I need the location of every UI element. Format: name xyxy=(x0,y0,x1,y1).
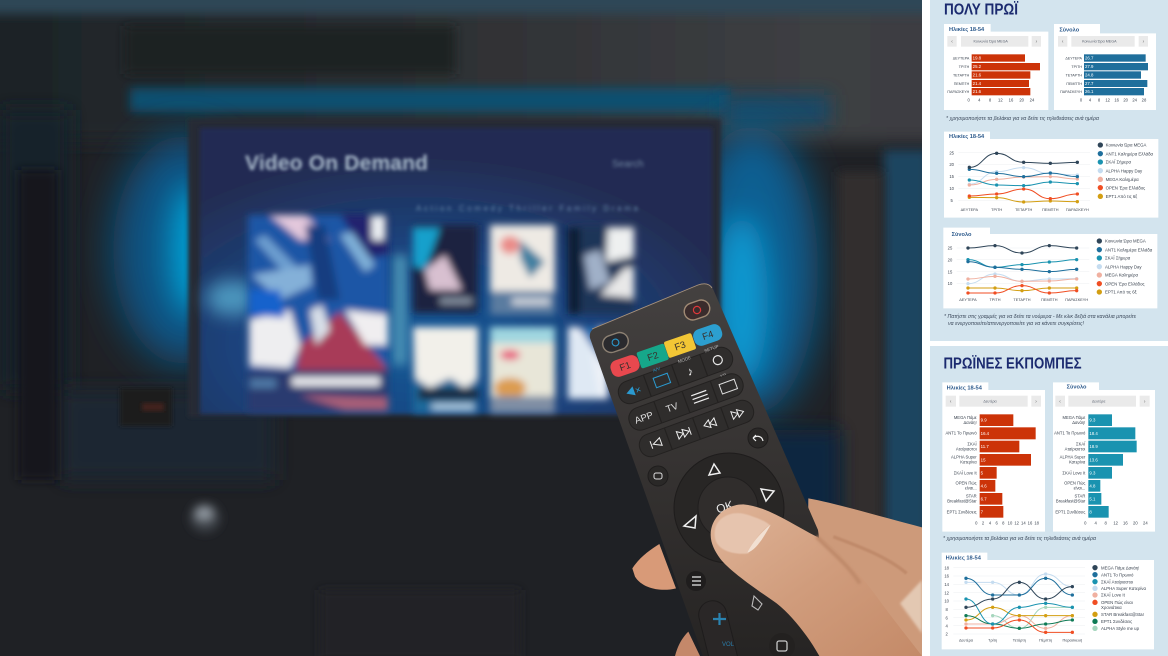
bar chart: Σύνολο shows: Σύνολο xyxy=(1067,385,1087,391)
poster: thumbnail 4 xyxy=(413,327,478,413)
button row: APP, TV, menu, keyboard: APP xyxy=(633,410,655,427)
bar chart: Ηλικίες 18-54 shows: ΣΚΑΪ Love It xyxy=(954,470,978,475)
bar chart: Σύνολο shows: ΑΝΤ1 Το Πρωινό xyxy=(1054,431,1086,436)
bar chart: Σύνολο: 26.1 xyxy=(1085,89,1094,94)
bar chart: Ηλικίες 18-54 shows: 6.7 xyxy=(981,496,987,501)
legend: ΕΡΤ1 Από τις 6ξ xyxy=(1106,194,1137,199)
bar chart: Σύνολο shows: 8 xyxy=(1105,521,1108,526)
bar chart: Σύνολο: 16 xyxy=(1114,97,1120,102)
line chart: shows Ηλικίες 18-54: Παρασκευή xyxy=(1063,639,1082,643)
bar chart: Σύνολο shows: Breakfast@Star xyxy=(1056,499,1086,504)
bar chart: Σύνολο shows: Δευτέρα xyxy=(1092,400,1106,404)
bar chart: Σύνολο shows: ALPHA Super xyxy=(1060,454,1086,459)
function keys xyxy=(609,322,724,379)
bar chart: Ηλικίες 18-54 shows: Δευτέρα xyxy=(983,400,998,404)
button row: APP, TV, menu, keyboard: TV xyxy=(665,401,680,415)
bar chart: Σύνολο shows: ΣΚΑΪ Love It xyxy=(1062,470,1086,475)
lamp highlight xyxy=(190,504,220,532)
note: instructions xyxy=(944,313,1137,327)
bar chart: Σύνολο shows: STAR xyxy=(1075,494,1085,499)
bar chart: Ηλικίες 18-54 shows: ALPHA Super xyxy=(951,454,977,459)
note: instructions: * Πατήστε στις γραμμές για να δείτε τα νούμερα - Με κλικ δεξιά στα κανάλια μπορείτε xyxy=(944,313,1137,320)
line chart: Σύνολο: Σύνολο xyxy=(952,232,972,238)
legend: ΑΝΤ1 Το Πρωινό xyxy=(1101,572,1134,577)
bar chart: Ηλικίες 18-54 shows: STAR xyxy=(966,494,977,499)
line chart: shows Ηλικίες 18-54: Πέμπτη xyxy=(1039,639,1052,643)
key captions xyxy=(654,344,726,376)
line chart: Ηλικίες 18-54: 25 xyxy=(949,150,955,155)
bar chart: Σύνολο shows: 18.4 xyxy=(1089,431,1098,436)
line chart: Ηλικίες 18-54: ΤΡΙΤΗ xyxy=(991,208,1002,212)
poster: thumbnail 5 xyxy=(490,327,555,413)
line chart: shows Ηλικίες 18-54: Δευτέρα xyxy=(959,639,974,643)
note: * χρησιμοποιήστε τα βελάκια για να δείτε τις τηλεθεάσεις ανά ημέρα xyxy=(943,535,1097,542)
bar chart: Ηλικίες 18-54 shows: 8 xyxy=(1002,521,1005,526)
bar chart: Ηλικίες 18-54: ΔΕΥΤΕΡΑ xyxy=(953,56,970,60)
line chart: Σύνολο: 25 xyxy=(948,246,953,251)
bar chart: Ηλικίες 18-54: ΤΕΤΑΡΤΗ xyxy=(953,73,970,77)
bar chart: Ηλικίες 18-54 shows: Αταίριαστοι xyxy=(956,447,977,452)
line chart: shows Ηλικίες 18-54: 6 xyxy=(946,615,949,620)
bar chart: Ηλικίες 18-54 shows: ΣΚΑΪ xyxy=(967,442,977,447)
key captions: A/V xyxy=(652,366,661,373)
bar chart: Ηλικίες 18-54 shows: › xyxy=(1035,399,1037,405)
bar chart: Ηλικίες 18-54 shows: ΑΝΤ1 Το Πρωινό xyxy=(945,431,977,436)
bar chart: Σύνολο: ΔΕΥΤΕΡΑ xyxy=(1065,56,1083,60)
back fingers xyxy=(632,498,922,656)
bar chart: Σύνολο shows: Δανάη! xyxy=(1072,420,1085,425)
bar chart: Σύνολο shows: ‹ xyxy=(1059,399,1061,405)
bar chart: Σύνολο: ΤΕΤΑΡΤΗ xyxy=(1066,73,1082,77)
bar chart: Σύνολο shows: 12 xyxy=(1113,521,1119,526)
bar chart: Σύνολο: ‹ xyxy=(1062,39,1064,45)
bar chart: Ηλικίες 18-54: Ηλικίες 18-54 xyxy=(949,27,985,33)
line chart: Ηλικίες 18-54: 15 xyxy=(949,174,955,179)
bar chart: Ηλικίες 18-54: 12 xyxy=(998,97,1003,102)
directional pad xyxy=(674,453,784,563)
line chart: Σύνολο: 10 xyxy=(948,281,953,286)
bar chart: Σύνολο: Σύνολο xyxy=(1059,27,1080,33)
key captions: MODE xyxy=(677,355,692,364)
bar chart: Ηλικίες 18-54 shows: 16.4 xyxy=(981,431,990,436)
line chart: Σύνολο: ΤΡΙΤΗ xyxy=(989,298,1001,302)
bar chart: Ηλικίες 18-54 shows xyxy=(942,382,1045,532)
function keys: F3 xyxy=(673,339,687,353)
backlight glow right of TV xyxy=(686,125,818,415)
line chart: Σύνολο: ΠΑΡΑΣΚΕΥΗ xyxy=(1065,298,1088,302)
bar chart: Ηλικίες 18-54 shows: MEGA Πάμε xyxy=(954,415,977,420)
line chart: Ηλικίες 18-54: ΔΕΥΤΕΡΑ xyxy=(961,208,978,212)
line chart: shows Ηλικίες 18-54: 12 xyxy=(944,590,950,595)
bar chart: Σύνολο shows: 4.8 xyxy=(1089,483,1096,488)
bar chart: Ηλικίες 18-54 shows: είναι... xyxy=(965,486,977,491)
bar chart: Ηλικίες 18-54 shows: 10 xyxy=(1008,521,1013,526)
thumb nail xyxy=(715,513,770,554)
bar chart: Ηλικίες 18-54: ΤΡΙΤΗ xyxy=(959,65,970,69)
bar chart: Σύνολο shows: 16 xyxy=(1123,521,1128,526)
bar chart: Σύνολο: ΤΡΙΤΗ xyxy=(1071,65,1082,69)
legend xyxy=(1098,142,1153,199)
bar chart: Ηλικίες 18-54: 25.2 xyxy=(973,64,982,69)
button row: APP, TV, menu, keyboard xyxy=(628,373,744,431)
bar chart: Σύνολο shows: OPEN Πώς xyxy=(1064,481,1085,486)
bar chart: Ηλικίες 18-54 shows: 9.9 xyxy=(981,418,987,423)
bar chart: Σύνολο shows: 9.3 xyxy=(1089,418,1096,423)
bar chart: Ηλικίες 18-54: 0 xyxy=(968,97,971,102)
legend: ΕΡΤ1 Συνδέσεις xyxy=(1101,619,1132,624)
bar chart: Σύνολο: 20 xyxy=(1123,97,1129,102)
bar chart: Σύνολο shows: MEGA Πάμε xyxy=(1063,415,1085,420)
bar chart: Σύνολο shows: 9.3 xyxy=(1089,470,1096,475)
line chart: shows Ηλικίες 18-54: 2 xyxy=(946,632,949,637)
legend: ALPHA Super Κατερίνα xyxy=(1101,586,1146,591)
bar chart: Ηλικίες 18-54: 8 xyxy=(989,97,992,102)
bar chart: Σύνολο: › xyxy=(1142,39,1144,45)
volume rocker: VOL xyxy=(722,642,735,648)
key captions: KB xyxy=(720,372,727,379)
legend: MEGA Καλημέρα xyxy=(1106,177,1139,182)
bar chart: Ηλικίες 18-54 shows: 7 xyxy=(981,509,984,514)
menu list button xyxy=(686,571,706,591)
legend: STAR Breakfast@Star xyxy=(1101,612,1145,617)
function keys: F1 xyxy=(618,360,632,374)
poster: large feature xyxy=(248,215,388,412)
bar chart: Σύνολο shows: Κατερίνα xyxy=(1069,459,1086,464)
title: ΠΡΩΪΝΕΣ ΕΚΠΟΜΠΕΣ xyxy=(944,354,1082,372)
panel: ΠΡΩΪΝΕΣ ΕΚΠΟΜΠΕΣ xyxy=(930,346,1168,656)
button row: media controls xyxy=(638,400,754,458)
bar chart: Σύνολο shows: είναι... xyxy=(1074,486,1085,491)
bar chart: Σύνολο shows: ΣΚΑΪ xyxy=(1076,442,1086,447)
bar chart: Σύνολο: 4 xyxy=(1089,97,1092,102)
legend xyxy=(1092,565,1146,631)
bar chart: Ηλικίες 18-54 shows: 18 xyxy=(1034,521,1040,526)
legend: Χρονιάτικα xyxy=(1101,605,1122,610)
line chart: shows Ηλικίες 18-54: 4 xyxy=(946,623,949,628)
legend: ΑΝΤ1 Καλημέρα Ελλάδα xyxy=(1106,151,1153,156)
bar chart: Σύνολο shows: 24 xyxy=(1143,521,1148,526)
button row: mute, A/V, mode, setup: ◀× xyxy=(624,383,643,400)
square button xyxy=(776,640,788,652)
bar chart: Ηλικίες 18-54 shows: 2 xyxy=(982,521,985,526)
legend: MEGA Πάμε Δανάη! xyxy=(1101,565,1139,570)
line chart: Σύνολο: ΤΕΤΑΡΤΗ xyxy=(1013,298,1031,302)
legend: Κοινωνία Ώρα MEGA xyxy=(1106,143,1147,148)
bar chart: Ηλικίες 18-54: 24 xyxy=(1030,97,1035,102)
bar chart: Ηλικίες 18-54: 4 xyxy=(978,97,981,102)
note: * χρησιμοποιήστε τα βελάκια για να δείτε τις τηλεθεάσεις ανά ημέρα xyxy=(946,115,1100,122)
line chart: shows Ηλικίες 18-54: 18 xyxy=(944,565,950,570)
bar chart: Σύνολο shows: 4 xyxy=(1095,521,1098,526)
panel: ΠΟΛΥ ΠΡΩΙ xyxy=(930,0,1168,341)
line chart: shows Ηλικίες 18-54: 14 xyxy=(944,582,950,587)
line chart: Ηλικίες 18-54: 5 xyxy=(951,198,954,203)
line chart: Σύνολο: ΔΕΥΤΕΡΑ xyxy=(959,298,977,302)
button row: mute, A/V, mode, setup: ♪ xyxy=(685,364,695,379)
bar chart: Ηλικίες 18-54 shows: Ηλικίες 18-54 xyxy=(947,385,983,391)
line chart: Ηλικίες 18-54: ΠΕΜΠΤΗ xyxy=(1042,208,1059,212)
bar chart: Σύνολο: 27.7 xyxy=(1085,81,1094,86)
title: ΠΟΛΥ ΠΡΩΪ xyxy=(944,2,1019,19)
line chart: Ηλικίες 18-54: ΤΕΤΑΡΤΗ xyxy=(1015,208,1032,212)
bar chart: Ηλικίες 18-54: ‹ xyxy=(951,39,953,45)
right speaker and wall xyxy=(773,146,922,528)
bar chart: Σύνολο shows: › xyxy=(1144,399,1146,405)
bar chart: Σύνολο: 26.7 xyxy=(1085,55,1094,60)
line chart: shows Ηλικίες 18-54: 8 xyxy=(946,607,949,612)
bar chart: Ηλικίες 18-54 shows: Κατερίνα xyxy=(960,459,977,464)
line chart: shows Ηλικίες 18-54: Τετάρτη xyxy=(1013,639,1026,643)
legend: ΣΚΑΪ Love It xyxy=(1101,593,1126,598)
legend: ΑΝΤ1 Καλημέρα Ελλάδα xyxy=(1105,247,1153,252)
poster: thumbnail 3 xyxy=(568,226,634,314)
remote control xyxy=(590,283,835,656)
line chart: shows Ηλικίες 18-54 xyxy=(942,553,1154,649)
thumb xyxy=(711,504,922,656)
back button xyxy=(748,428,768,448)
bar chart: Σύνολο shows: 20 xyxy=(1133,521,1138,526)
bar chart: Ηλικίες 18-54 shows: 6 xyxy=(996,521,999,526)
button: power blue xyxy=(602,332,629,354)
line chart: shows Ηλικίες 18-54: 10 xyxy=(944,599,950,604)
bar chart: Ηλικίες 18-54: ΠΑΡΑΣΚΕΥΗ xyxy=(947,90,970,94)
bar chart: Σύνολο shows: Αταίριαστοι xyxy=(1065,447,1085,452)
bar chart: Σύνολο: 0 xyxy=(1080,97,1083,102)
function keys: F4 xyxy=(701,329,715,343)
line chart: Ηλικίες 18-54 xyxy=(944,132,1158,218)
bar chart: Σύνολο: 12 xyxy=(1105,97,1111,102)
bar chart: Ηλικίες 18-54 shows: 0 xyxy=(975,521,978,526)
bar chart: Ηλικίες 18-54 shows: 14 xyxy=(1021,521,1026,526)
line chart: Ηλικίες 18-54: ΠΑΡΑΣΚΕΥΗ xyxy=(1066,208,1089,212)
bar chart: Σύνολο xyxy=(1054,24,1156,110)
bar chart: Σύνολο: ΠΕΜΠΤΗ xyxy=(1066,82,1082,86)
directional pad: OK xyxy=(714,498,735,517)
bar chart: Ηλικίες 18-54: 21.4 xyxy=(973,81,982,86)
bar chart: Ηλικίες 18-54 shows: 12 xyxy=(1014,521,1020,526)
screen heading: Video On Demand xyxy=(245,152,428,175)
function keys: F2 xyxy=(646,350,660,364)
legend: Κοινωνία Ώρα MEGA xyxy=(1105,239,1146,244)
bar chart: Σύνολο: Κοινωνία Ώρα MEGA xyxy=(1082,40,1117,44)
line chart: shows Ηλικίες 18-54: Ηλικίες 18-54 xyxy=(946,555,982,561)
TV frame xyxy=(188,119,721,417)
bar chart: Ηλικίες 18-54 shows: ‹ xyxy=(950,399,952,405)
bar chart: Σύνολο shows: 13.6 xyxy=(1089,457,1098,462)
bar chart: Σύνολο shows: 0 xyxy=(1084,521,1087,526)
line chart: shows Ηλικίες 18-54: 16 xyxy=(944,574,950,579)
lower wall and stand xyxy=(60,388,520,656)
bar chart: Ηλικίες 18-54: 19.8 xyxy=(973,55,982,60)
line chart: Σύνολο: ΠΕΜΠΤΗ xyxy=(1041,298,1058,302)
button behind thumb xyxy=(752,596,762,610)
poster: thumbnail 6 xyxy=(568,327,608,399)
bar chart: Ηλικίες 18-54: Κοινωνία Ώρα MEGA xyxy=(973,40,1008,44)
legend: ΣΚΑΪ Σήμερα xyxy=(1105,256,1131,261)
line chart: Σύνολο xyxy=(943,228,1157,308)
legend: ALPHA Happy Day xyxy=(1105,264,1142,269)
bar chart: Σύνολο shows: 18.9 xyxy=(1089,444,1098,449)
legend: OPEN Πώς είναι xyxy=(1101,600,1133,605)
bar chart: Ηλικίες 18-54: 21.6 xyxy=(973,72,982,77)
line chart: shows Ηλικίες 18-54: Τρίτη xyxy=(988,639,997,643)
line chart: Σύνολο: 20 xyxy=(948,257,953,262)
bar chart: Ηλικίες 18-54 xyxy=(944,24,1048,110)
legend: ΣΚΑΪ Σήμερα xyxy=(1106,160,1131,165)
volume rocker xyxy=(698,600,737,654)
bar chart: Ηλικίες 18-54 shows: 15 xyxy=(981,457,986,462)
line chart: Σύνολο: 15 xyxy=(948,269,953,274)
bar chart: Ηλικίες 18-54 shows: 4 xyxy=(989,521,992,526)
home button xyxy=(648,466,668,486)
line chart: Ηλικίες 18-54: 10 xyxy=(949,186,955,191)
legend: OPEN Έρα Ελλάδος xyxy=(1106,185,1145,190)
bar chart: Σύνολο: 24 xyxy=(1132,97,1138,102)
bar chart: Ηλικίες 18-54: 20 xyxy=(1019,97,1025,102)
legend: ALPHA Style me up xyxy=(1101,626,1140,631)
bar chart: Ηλικίες 18-54: › xyxy=(1035,39,1037,45)
search box: Search xyxy=(612,159,644,170)
bar chart: Ηλικίες 18-54 shows: ΕΡΤ1 Συνδέσεις xyxy=(947,509,977,514)
bar chart: Σύνολο: 8 xyxy=(1098,97,1101,102)
button: power red xyxy=(684,299,710,321)
bar chart: Ηλικίες 18-54 shows: 4.6 xyxy=(981,483,987,488)
poster: thumbnail 1 xyxy=(413,225,478,313)
bar chart: Ηλικίες 18-54 shows: OPEN Πώς xyxy=(955,481,977,486)
bar chart: Σύνολο: ΠΑΡΑΣΚΕΥΗ xyxy=(1060,90,1082,94)
left speaker xyxy=(18,170,58,480)
legend: ALPHA Happy Day xyxy=(1106,168,1143,173)
button row: mute, A/V, mode, setup xyxy=(618,346,734,404)
bar chart: Σύνολο shows: ΕΡΤ1 Συνδέσεις xyxy=(1055,509,1085,514)
poster: thumbnail 2 xyxy=(490,225,555,315)
TV screen xyxy=(200,128,712,414)
bar chart: Ηλικίες 18-54: 16 xyxy=(1009,97,1014,102)
remote body xyxy=(590,283,835,656)
bar chart: Σύνολο shows xyxy=(1053,382,1155,532)
bar chart: Ηλικίες 18-54 shows: Breakfast@Star xyxy=(947,499,977,504)
category menu: Action Comedy Thriller Family Drama xyxy=(416,204,639,213)
bar chart: Ηλικίες 18-54 shows: 16 xyxy=(1028,521,1033,526)
legend xyxy=(1097,238,1153,295)
legend: ΕΡΤ1 Από τις 6ξ xyxy=(1105,290,1137,295)
bar chart: Ηλικίες 18-54 shows: 11.7 xyxy=(981,444,989,449)
line chart: Ηλικίες 18-54: 20 xyxy=(949,162,955,167)
key captions: SETUP xyxy=(704,344,719,354)
bar chart: Ηλικίες 18-54: 21.6 xyxy=(973,89,982,94)
line chart: Ηλικίες 18-54: Ηλικίες 18-54 xyxy=(949,134,985,140)
bar chart: Ηλικίες 18-54 shows: Δανάη! xyxy=(964,420,977,425)
legend: ΣΚΑΪ Αταίριαστοι xyxy=(1101,579,1133,584)
bar chart: Ηλικίες 18-54 shows: 5 xyxy=(981,470,984,475)
bar chart: Σύνολο shows: 8 xyxy=(1089,509,1092,514)
note: instructions: να ενεργοποιείτε/απενεργοποιείτε για να κάνετε συγκρίσεις! xyxy=(948,321,1085,327)
bar chart: Ηλικίες 18-54: ΠΕΜΠΤΗ xyxy=(954,82,970,86)
bar chart: Σύνολο: 27.9 xyxy=(1085,64,1094,69)
backlight glow left of TV xyxy=(88,115,193,384)
legend: MEGA Καλημέρα xyxy=(1105,273,1139,278)
bar chart: Σύνολο: 24.8 xyxy=(1085,72,1094,77)
legend: OPEN Έρα Ελλάδος xyxy=(1105,281,1145,286)
bar chart: Σύνολο: 28 xyxy=(1142,97,1147,102)
bar chart: Σύνολο shows: 5.1 xyxy=(1089,496,1096,501)
